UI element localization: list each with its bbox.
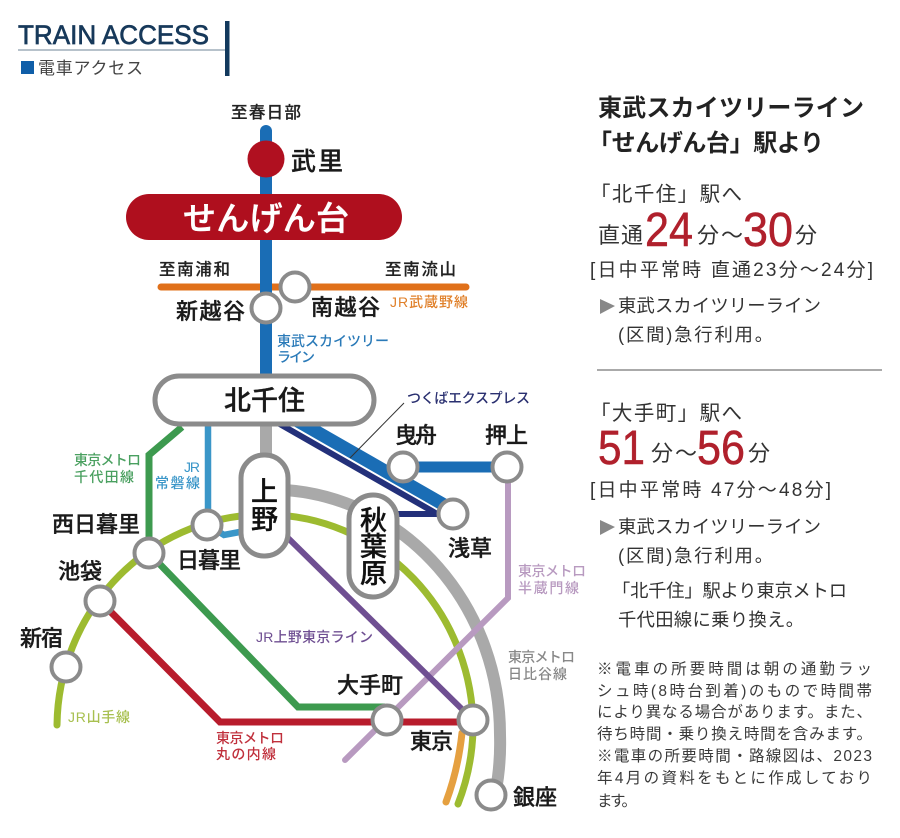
block: to Otemachi [590, 402, 847, 630]
block: to Otemachi: 「北千住」駅より東京メトロ [612, 580, 847, 601]
block: to Otemachi: 分～ [651, 441, 697, 466]
label: Oshiage: 押上 [485, 423, 528, 448]
label: Hikifune: 曳舟 [395, 423, 437, 448]
label: Ginza: 銀座 [513, 785, 557, 810]
line: orange tail [446, 733, 462, 802]
line: Tobu Skytree to Asakusa [296, 420, 453, 510]
label: Shin-Koshigaya: 新越谷 [176, 299, 245, 324]
label: Hibiya Line [508, 649, 575, 682]
notes: シュ時(8時台到着)のもので時間帯 [597, 682, 872, 700]
label: Chiyoda Line: 千代田線 [74, 469, 134, 485]
block: to Kita-Senju: (区間)急行利用。 [618, 324, 773, 345]
title: TRAIN ACCESS: TRAIN ACCESS [18, 20, 209, 50]
header [18, 20, 230, 78]
station: Nippori [192, 510, 222, 540]
line: Hibiya upper [260, 425, 272, 455]
label: Akihabara: 原 [360, 559, 387, 589]
notes: 年4月の資料をもとに作成しており [597, 769, 872, 787]
block: to Otemachi: (区間)急行利用。 [618, 545, 773, 566]
station: Ikebukuro [86, 586, 114, 616]
label: Ikebukuro: 池袋 [58, 559, 102, 584]
icon: arrow [600, 299, 615, 314]
block: to Kita-Senju: 「北千住」駅へ [590, 183, 742, 206]
line: Tobu Skytree to Oshiage [403, 462, 507, 472]
station: Shinjuku [52, 652, 80, 682]
label: Chiyoda Line: 東京メトロ [74, 452, 141, 468]
line: Tobu Skytree main [260, 131, 272, 380]
icon: arrow [600, 520, 615, 535]
label: Marunouchi Line: 東京メトロ [216, 730, 284, 746]
label: Hanzomon Line: 東京メトロ [518, 563, 586, 579]
station: Ueno pill [241, 455, 288, 556]
line: Ueno Tokyo [285, 535, 473, 720]
label: Takesato: 武里 [291, 148, 343, 176]
label: Tobu Skytree Line: 東武スカイツリー [277, 333, 389, 349]
block: to Otemachi: 56 [697, 422, 745, 475]
label: Chiyoda Line [74, 452, 141, 485]
label: Sengendai: せんげん台 [183, 200, 349, 237]
label: Joban Line [155, 459, 200, 491]
label: JR Musashino: JR武蔵野線 [390, 294, 468, 310]
station: Oshiage [492, 452, 522, 482]
label: Tobu Skytree Line: ライン [277, 349, 315, 365]
label: Joban Line: 常磐線 [155, 475, 200, 491]
label: Hibiya Line: 日比谷線 [508, 666, 567, 682]
line: Hibiya arc [285, 490, 500, 795]
label: Hibiya Line: 東京メトロ [508, 649, 575, 665]
station: Tokyo [458, 706, 488, 734]
notes: ※電車の所要時間・路線図は、2023 [597, 747, 872, 765]
block: to Kita-Senju: 分 [795, 223, 817, 248]
line: Chiyoda [149, 427, 385, 707]
station: Nishi-Nippori [134, 538, 164, 568]
label: JR Ueno-Tokyo Line: JR上野東京ライン [256, 629, 373, 645]
label: Tsukuba Express: つくばエクスプレス [407, 390, 530, 406]
station: Otemachi [372, 706, 402, 734]
label: Akihabara [360, 506, 387, 589]
label: Minami-Koshigaya: 南越谷 [311, 295, 380, 320]
label: Marunouchi Line [216, 730, 284, 762]
block: to Otemachi: [日中平常時 47分～48分] [590, 479, 831, 501]
block: to Otemachi: 東武スカイツリーライン [618, 516, 821, 537]
block: to Kita-Senju: 30 [743, 204, 793, 257]
label: Nippori: 日暮里 [177, 548, 241, 573]
station: Kita-Senju pill [155, 376, 374, 424]
block: to Otemachi: 「大手町」駅へ [590, 402, 742, 425]
label: JR Yamanote: JR山手線 [68, 709, 130, 725]
label: Hanzomon Line: 半蔵門線 [518, 580, 579, 596]
block: to Kita-Senju [590, 183, 873, 345]
line: Hanzomon [345, 468, 508, 760]
heading [588, 95, 864, 157]
label: Tokyo: 東京 [410, 729, 453, 754]
block: to Kita-Senju: [日中平常時 直通23分～24分] [590, 259, 873, 281]
label: Hanzomon Line [518, 563, 586, 596]
station: Takesato [248, 140, 284, 178]
label: Marunouchi Line: 丸の内線 [216, 746, 276, 762]
station: Asakusa [438, 500, 468, 528]
notes: ます。 [597, 792, 637, 810]
icon: blue square [21, 61, 34, 74]
line: Tsukuba Express [278, 423, 437, 514]
label: destination Kasukabe: 至春日部 [231, 103, 301, 122]
heading: 東武スカイツリーライン [598, 95, 864, 122]
notes: により異なる場合があります。また、 [597, 703, 872, 721]
station markers [52, 140, 522, 810]
station: Minami-Koshigaya [280, 272, 310, 302]
label: Ueno: 野 [251, 505, 278, 535]
label: Ueno [251, 477, 278, 535]
line: Joban [208, 425, 245, 535]
label: Akihabara: 秋 [360, 506, 387, 536]
panel: access times [588, 95, 882, 810]
label: Akihabara: 葉 [360, 532, 387, 562]
notes [597, 660, 872, 810]
label: Tobu Skytree Line [277, 333, 389, 365]
line: JR Musashino [161, 284, 466, 290]
station: Sengendai pill [126, 194, 402, 240]
station: Hikifune [388, 452, 418, 482]
label: Otemachi: 大手町 [337, 673, 403, 698]
subtitle: 電車アクセス [38, 59, 143, 78]
line: Marunouchi [100, 601, 473, 722]
block: to Kita-Senju: 分～ [697, 223, 743, 248]
block: to Kita-Senju: 直通 [598, 223, 643, 248]
heading: 「せんげん台」駅より [588, 130, 824, 157]
station: Shin-Koshigaya [252, 294, 280, 322]
label: Joban Line: JR [184, 459, 200, 475]
block: to Otemachi: 千代田線に乗り換え。 [618, 609, 804, 630]
block: to Otemachi: 51 [598, 422, 645, 475]
notes: 待ち時間・乗り換え時間を含みます。 [597, 725, 872, 743]
map labels [20, 103, 586, 810]
label: Kita-Senju: 北千住 [224, 386, 305, 416]
block: to Otemachi: 分 [748, 441, 770, 466]
station: Akihabara pill [349, 495, 397, 597]
block: to Kita-Senju: 24 [645, 204, 693, 257]
leader: Tsukuba Express [350, 403, 404, 458]
label: destination Minami-Nagareyama: 至南流山 [385, 260, 456, 279]
label: Ueno: 上 [251, 477, 278, 507]
block: to Kita-Senju: 東武スカイツリーライン [618, 295, 821, 316]
route map [57, 131, 508, 804]
line: Yamanote [57, 515, 473, 804]
station: Ginza [476, 780, 506, 810]
label: Shinjuku: 新宿 [20, 626, 63, 651]
notes: ※電車の所要時間は朝の通勤ラッ [597, 660, 872, 678]
label: Asakusa: 浅草 [448, 536, 492, 561]
label: destination Minami-Urawa: 至南浦和 [159, 260, 230, 279]
label: Nishi-Nippori: 西日暮里 [52, 512, 140, 537]
